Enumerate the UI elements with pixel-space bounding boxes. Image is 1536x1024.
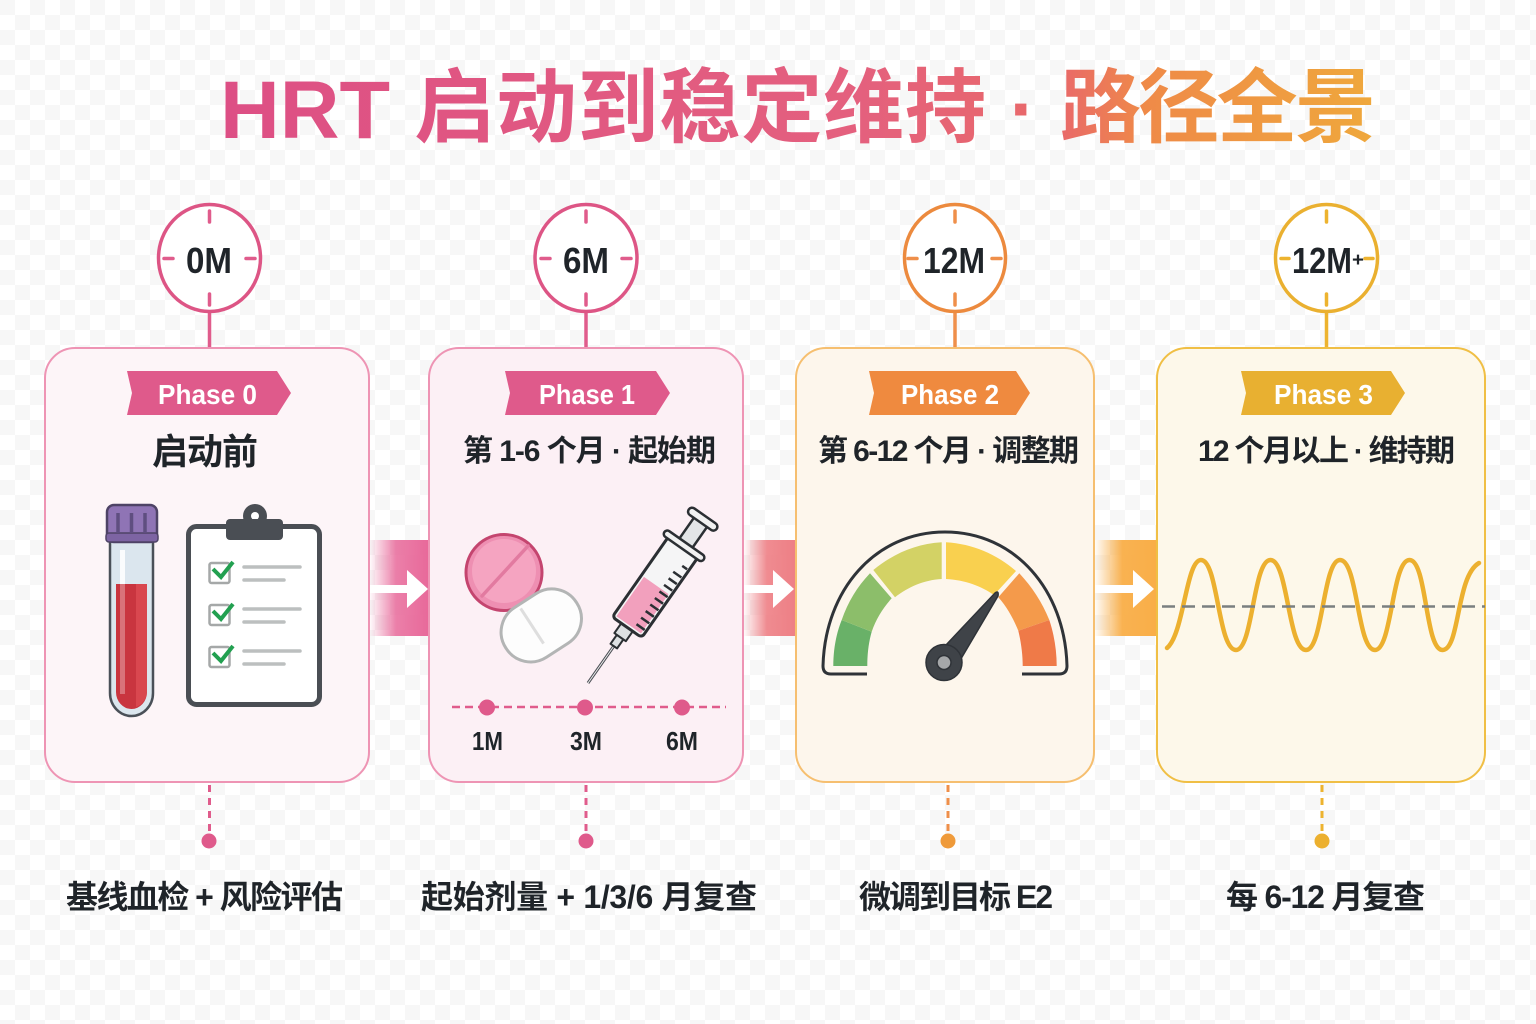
phase 0 heading: 启动前 (152, 431, 258, 472)
clock: 6M (535, 204, 637, 348)
phase 1 heading: 第 1-6 个月 · 起始期 (463, 435, 716, 468)
icon: checklist clipboard (188, 504, 320, 704)
clock: 12M: 12M (923, 240, 985, 281)
phase 1 ribbon (505, 371, 670, 415)
gauge needle (926, 592, 998, 680)
footnote: phase 2: 微调到目标 E2 (859, 879, 1053, 915)
clock: 0M: 0M (186, 240, 232, 281)
phase 2 ribbon (869, 371, 1030, 415)
title: 路径全景 (1060, 64, 1376, 154)
dose timeline: 3M (570, 726, 602, 756)
icon: white oval pill (490, 578, 593, 673)
footnote: phase 1 (421, 785, 757, 915)
clock: 0M (158, 204, 260, 348)
phase 2 ribbon: Phase 2 (901, 379, 999, 410)
footnote: phase 0 (66, 785, 343, 915)
arrow: phase 2 to phase 3 (1090, 540, 1157, 636)
clock: 6M: 6M (563, 240, 609, 281)
checklist rows (210, 562, 300, 667)
stable hormone wave chart (1162, 560, 1485, 650)
clock: 12M (904, 204, 1006, 348)
dose timeline: 6M (666, 726, 698, 756)
title: · (1010, 64, 1036, 153)
panel: phase 0 (45, 348, 369, 782)
phase 1 ribbon: Phase 1 (539, 379, 635, 410)
panel: phase 2 (796, 348, 1094, 782)
icon: syringe (568, 502, 725, 697)
footnote: phase 0: 基线血检 + 风险评估 (66, 879, 343, 915)
icon: pink round pill (466, 534, 542, 610)
gauge (823, 532, 1067, 680)
panel: phase 1 (429, 348, 743, 782)
panel: phase 3 (1157, 348, 1485, 782)
dose timeline (452, 700, 726, 756)
dose timeline: 1M (472, 726, 503, 756)
arrow: phase 1 to phase 2 (740, 540, 796, 636)
clock: 12M+ (1276, 204, 1378, 348)
clock: 12M+: + (1352, 250, 1364, 271)
title: 启动到稳定维持 (414, 64, 986, 154)
phase 3 ribbon: Phase 3 (1274, 379, 1373, 410)
phase 3 heading: 12 个月以上 · 维持期 (1198, 435, 1455, 468)
footnote: phase 3 (1226, 785, 1425, 915)
clock: 12M+: 12M (1292, 240, 1352, 281)
phase 0 ribbon: Phase 0 (158, 379, 257, 410)
footnote: phase 1: 起始剂量 + 1/3/6 月复查 (421, 879, 757, 915)
phase 3 ribbon (1241, 371, 1405, 415)
arrow: phase 0 to phase 1 (369, 540, 429, 636)
phase 2 heading: 第 6-12 个月 · 调整期 (818, 435, 1079, 468)
title: HRT (220, 65, 390, 156)
title (220, 64, 1376, 156)
phase 0 ribbon (127, 371, 291, 415)
footnote: phase 3: 每 6-12 月复查 (1226, 879, 1425, 915)
footnote: phase 2 (859, 785, 1053, 915)
icon: blood test tube (106, 505, 158, 716)
